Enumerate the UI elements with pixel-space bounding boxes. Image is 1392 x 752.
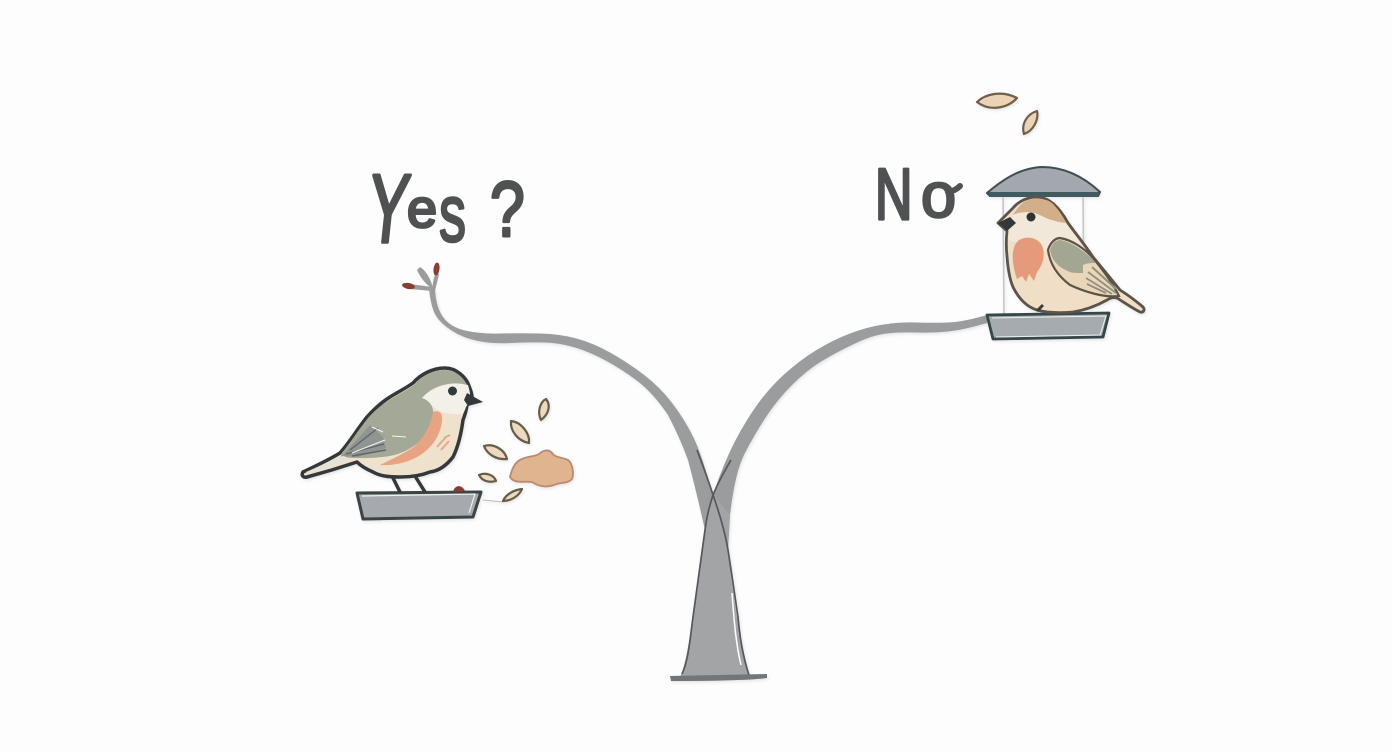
right bird face (1009, 212, 1085, 252)
feeder strings (1003, 193, 1084, 314)
twig buds (402, 262, 440, 291)
white face (422, 384, 470, 414)
trunk outline lines (682, 460, 731, 674)
legs (392, 476, 425, 492)
eye (1026, 212, 1036, 222)
label: question mark: ? (490, 165, 525, 253)
label: Yes: e (407, 179, 437, 239)
orange breast (380, 411, 442, 465)
beak (998, 217, 1016, 231)
label: No: N (875, 155, 912, 235)
trunk (680, 495, 750, 677)
wing (1048, 238, 1119, 296)
grey cap and back (341, 370, 467, 458)
label: No (875, 155, 960, 235)
right tray (987, 313, 1109, 339)
label: Yes: Y (363, 156, 414, 264)
left branch (429, 289, 728, 550)
orange breast (1013, 238, 1044, 282)
beak (464, 393, 483, 406)
right falling seeds (977, 94, 1037, 134)
right bird feeder (987, 167, 1144, 339)
tree: forked branches and trunk (429, 289, 987, 681)
label: No: o (921, 161, 956, 231)
label: Yes (363, 156, 466, 264)
label: Yes: s (439, 167, 466, 259)
left seeds and crumbs (479, 399, 573, 501)
tan cap (1013, 199, 1066, 223)
wing feathers (342, 425, 386, 457)
bird body (302, 368, 472, 477)
left bird on tray (302, 368, 503, 519)
orange crumb pile (510, 450, 573, 486)
eye (448, 386, 457, 396)
seed on tray (453, 486, 465, 492)
tail (306, 456, 352, 474)
left tray (357, 492, 481, 519)
right bird body (998, 197, 1144, 313)
feeder roof (987, 167, 1100, 196)
foot (1037, 305, 1043, 311)
right branch (705, 315, 987, 550)
trunk base (670, 674, 767, 681)
